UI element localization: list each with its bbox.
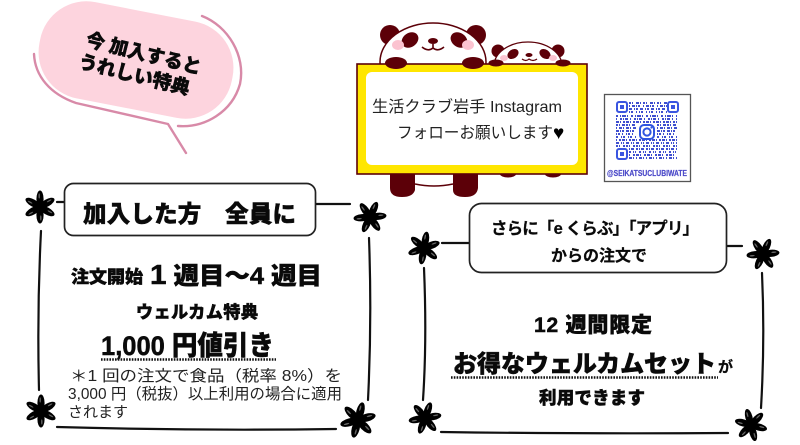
flower corners	[24, 190, 392, 442]
QR code pattern	[616, 103, 677, 158]
panel frame lines	[38, 202, 370, 430]
welcome set: が	[718, 358, 733, 376]
footnote: 3,000 円（税抜）以上利用の場合に適用	[68, 385, 342, 403]
panel frame lines	[423, 243, 763, 433]
bubble text: 今 加入すると	[84, 28, 204, 79]
welcome benefit label: ウェルカム特典	[136, 302, 258, 322]
panel: app orders	[404, 204, 785, 445]
order period: 1 週目～4 週目	[150, 259, 322, 290]
welcome set: お得なウェルカムセット	[453, 351, 716, 378]
panda paws on sign	[385, 57, 570, 69]
small panda	[492, 42, 564, 178]
QR finder marks	[617, 102, 678, 159]
sign frame	[357, 64, 587, 174]
order period	[71, 259, 322, 290]
sign text	[372, 97, 564, 144]
panel heading box	[470, 204, 726, 272]
sign text: ♥	[553, 123, 564, 144]
dotted underline	[451, 376, 718, 379]
sign board: Instagram message	[357, 57, 587, 174]
panel: all new members	[24, 184, 392, 442]
footnote	[68, 367, 342, 421]
QR handle text: @SEIKATSUCLUBIWATE	[607, 168, 687, 178]
discount amount: 1,000 円値引き	[101, 331, 274, 361]
sign inner panel	[366, 72, 578, 165]
speech bubble: heading	[30, 0, 242, 153]
panel heading box	[64, 184, 316, 236]
bubble text: うれしい特典	[76, 50, 192, 100]
flower corners	[404, 229, 785, 445]
icon: Instagram logo	[640, 125, 654, 139]
sign text: フォローお願いします	[397, 124, 553, 142]
panel heading text: 加入した方 全員に	[83, 200, 296, 227]
footnote: ＊1 回の注文で食品（税率 8%）を	[70, 367, 342, 385]
panel heading text	[491, 219, 699, 265]
bubble text	[76, 28, 204, 101]
dotted underline	[101, 358, 276, 361]
panel heading text: からの注文で	[551, 247, 647, 265]
sign text: 生活クラブ岩手 Instagram	[372, 97, 562, 116]
limited period: 12 週間限定	[534, 314, 652, 337]
closing text: 利用できます	[539, 388, 645, 408]
large panda	[380, 23, 486, 197]
bubble pink fill	[30, 0, 242, 127]
footnote: されます	[68, 404, 128, 421]
QR code card	[604, 94, 690, 182]
order period: 注文開始	[71, 267, 144, 287]
panel heading text: さらに「e くらぶ」「アプリ」	[491, 219, 699, 238]
bubble outline and tail	[34, 16, 241, 153]
